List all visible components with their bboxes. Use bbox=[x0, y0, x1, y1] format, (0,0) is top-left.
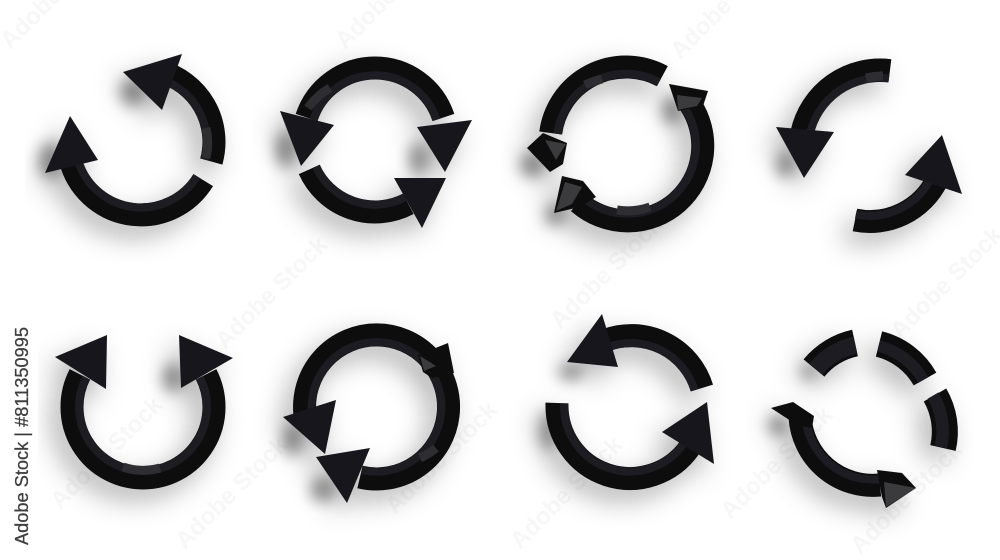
icon: ring with three heads, bottom row 2 bbox=[282, 335, 454, 503]
watermarks: Adobe Stock bbox=[170, 431, 293, 554]
icon: two opposing arrows, bottom row 3 bbox=[540, 314, 714, 478]
icon: two arrows with large heads, top row 2 bbox=[275, 68, 472, 228]
stock id caption: Adobe Stock | #811350995 bbox=[12, 327, 32, 545]
watermarks: Adobe Stock bbox=[45, 391, 168, 514]
watermarks: Adobe Stock bbox=[505, 431, 628, 554]
watermarks: Adobe Stock bbox=[845, 436, 968, 559]
icon: two separate curved arrows, top row 4 bbox=[776, 70, 962, 221]
watermarks: Adobe Stock bbox=[545, 211, 668, 334]
watermarks: Adobe Stock bbox=[210, 231, 333, 354]
icon: two arrows circling, top row 1 bbox=[38, 54, 214, 215]
icon: ring with faceted heads, top row 3 bbox=[520, 67, 708, 225]
watermarks: Adobe Stock bbox=[380, 396, 503, 519]
watermarks: Adobe Stock bbox=[715, 401, 838, 524]
icon: U-shaped ring with two heads, bottom row 1 bbox=[55, 335, 233, 478]
icon: dashed segmented ring, bottom row 4 bbox=[768, 343, 945, 508]
